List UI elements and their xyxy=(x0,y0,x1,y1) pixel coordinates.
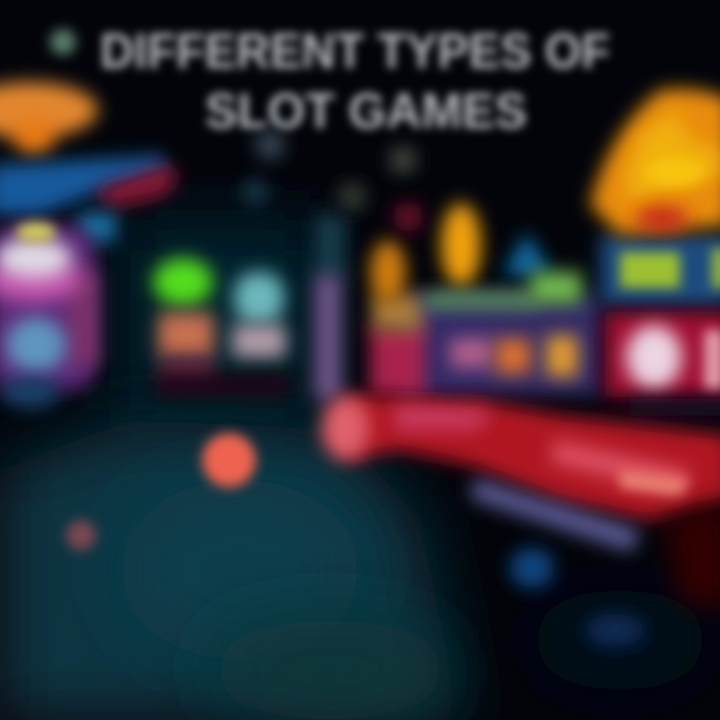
icon: title marker xyxy=(50,29,76,55)
slot machine: right with jackpot sign xyxy=(590,89,720,416)
floor lights xyxy=(66,433,645,646)
slot machines: centre pair xyxy=(153,258,290,395)
title xyxy=(100,23,610,139)
title: DIFFERENT TYPES OF xyxy=(100,23,610,79)
slot machines: back row xyxy=(314,202,600,400)
red console xyxy=(321,395,720,610)
small distant lights xyxy=(243,131,416,211)
slot machine: left xyxy=(0,155,180,408)
title: SLOT GAMES xyxy=(205,83,527,139)
neon sign: top left xyxy=(0,82,98,155)
